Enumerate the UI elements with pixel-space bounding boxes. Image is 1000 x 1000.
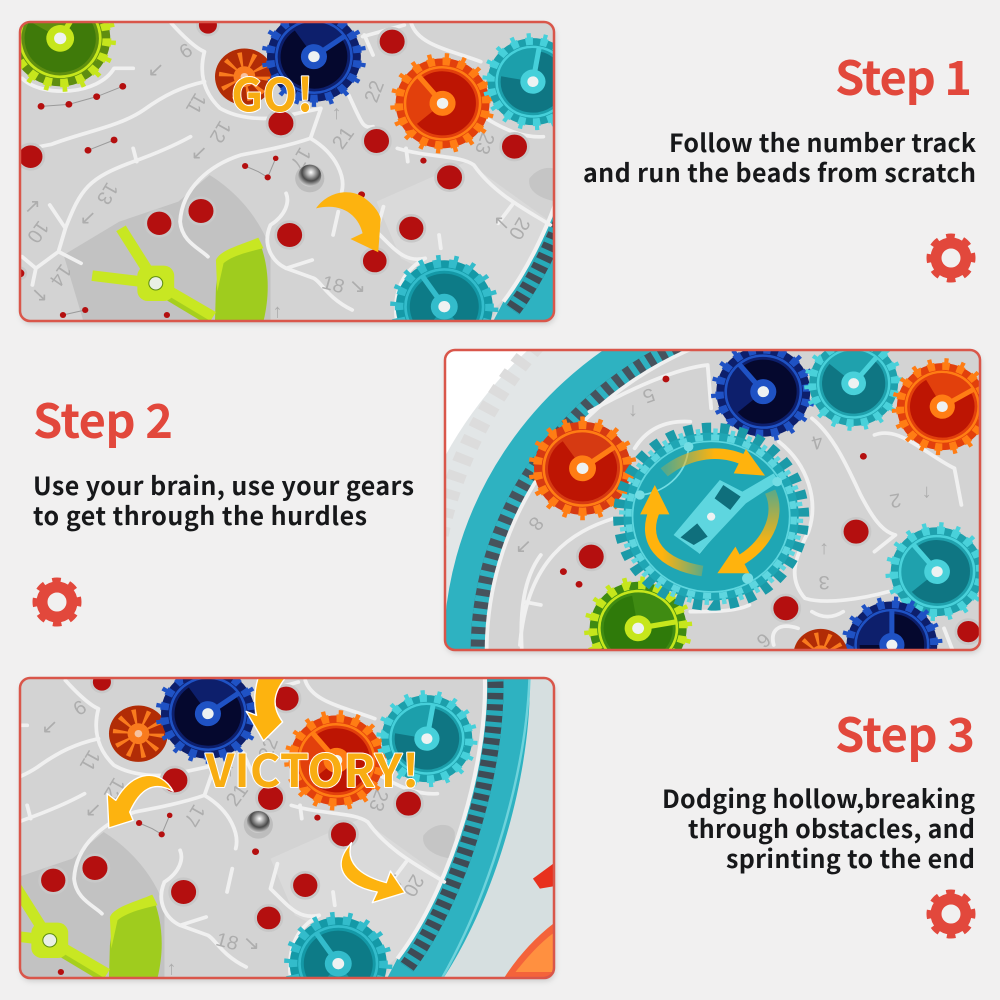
panel: step 2 photo: 6: [752, 628, 775, 652]
heading: step 3: Step 3: [835, 697, 975, 766]
text: step 3 description: [662, 780, 975, 876]
label: VICTORY!: VICTORY!: [204, 736, 419, 801]
text: step 3 description: Dodging hollow,breaking: [662, 780, 975, 816]
text: step 1 description: and run the beads from scratch: [583, 154, 976, 190]
label: GO!: GO!: [231, 58, 313, 125]
arrows: three curved yellow: [107, 677, 405, 903]
panel: step 2 photo: 5: [639, 383, 658, 407]
text: step 2 description: Use your brain, use your gears: [33, 467, 414, 503]
panel: step 3 photo: [18, 676, 558, 984]
text: step 2 description: [33, 467, 414, 533]
heading: step 2: Step 2: [33, 383, 173, 452]
big center gear: [620, 429, 802, 604]
panel: step 2 photo: 8: [523, 512, 548, 534]
panel: step 2 photo: [444, 348, 984, 656]
panel: step 2 photo: ↓: [628, 399, 638, 421]
arrow: curved yellow: [316, 192, 381, 252]
steel ball: [295, 164, 324, 192]
text: step 3 description: sprinting to the end: [726, 840, 975, 876]
panel: step 2 photo: ↑: [819, 538, 829, 559]
text: step 1 description: Follow the number track: [669, 124, 976, 160]
steel ball: [244, 811, 273, 839]
panel: step 2 photo: ↓: [922, 481, 932, 502]
panel: step 2 photo: 2: [888, 488, 903, 512]
icon: gear step 3: [929, 892, 973, 936]
text: step 2 description: to get through the hurdles: [33, 497, 367, 533]
arrows: rotation cycle: [640, 449, 774, 573]
panel: step 2 photo: 4: [809, 430, 825, 453]
heading: step 1: Step 1: [835, 40, 972, 109]
text: step 1 description: [583, 124, 976, 190]
icon: gear step 2: [35, 580, 79, 624]
panel: step 2 photo: 3: [818, 571, 830, 592]
icon: gear step 1: [929, 236, 973, 280]
text: step 3 description: through obstacles, and: [688, 810, 975, 846]
panel: step 1 photo: [18, 20, 558, 326]
panel: step 2 photo: ↙: [515, 536, 532, 557]
